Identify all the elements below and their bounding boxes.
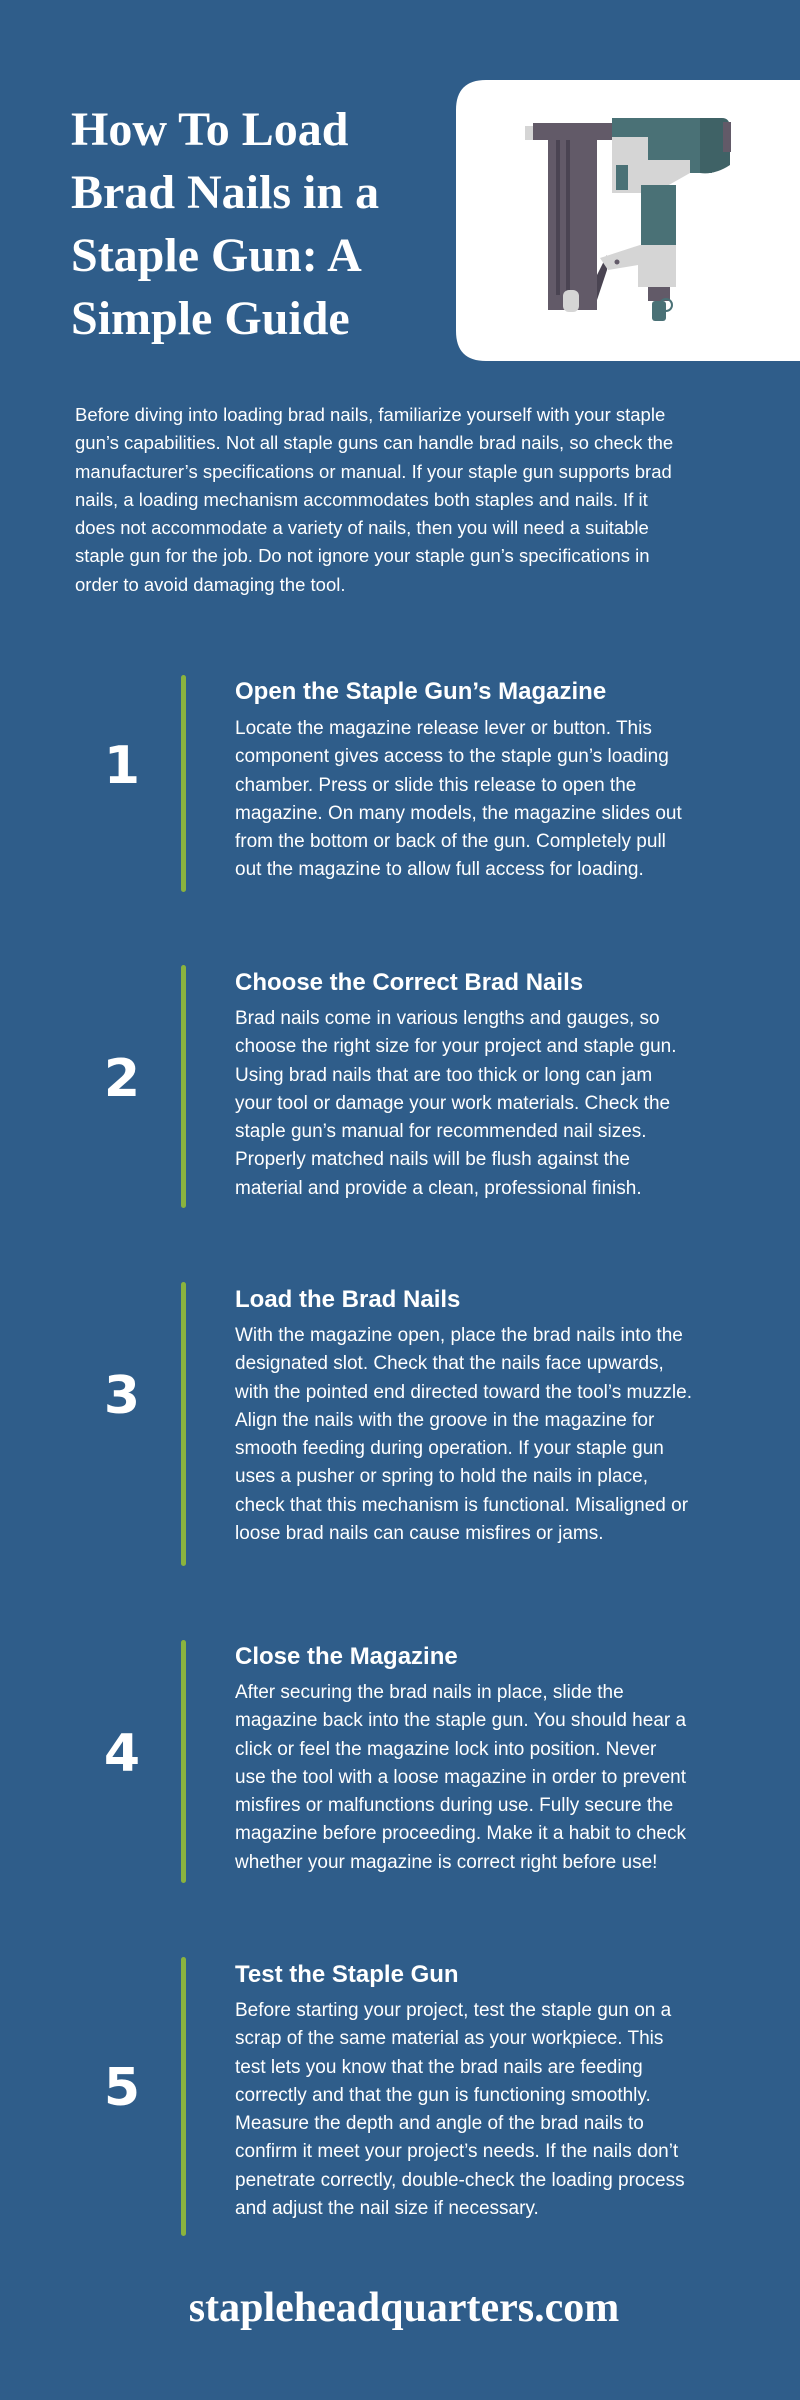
- panel: step 1: [104, 675, 682, 892]
- body 2: staple gun’s manual for recommended nail sizes.: [235, 1121, 647, 1142]
- illustration panel: nail gun: [456, 80, 800, 361]
- divider bar 2: [181, 965, 186, 1208]
- intro text: order to avoid damaging the tool.: [75, 574, 345, 595]
- body 1: out the magazine to allow full access for loading.: [235, 859, 644, 880]
- body 2: Properly matched nails will be flush against the: [235, 1149, 630, 1170]
- body 4: magazine before proceeding. Make it a habit to check: [235, 1823, 686, 1844]
- body 5: Before starting your project, test the staple gun on a: [235, 2000, 671, 2021]
- body 3: check that this mechanism is functional. Misaligned or: [235, 1495, 688, 1516]
- body 1: chamber. Press or slide this release to open the: [235, 775, 636, 796]
- body 1: Locate the magazine release lever or button. This: [235, 718, 652, 739]
- panel: step 3: [104, 1282, 692, 1566]
- body 5: Measure the depth and angle of the brad nails to: [235, 2113, 644, 2134]
- divider bar 1: [181, 675, 186, 892]
- body 3: designated slot. Check that the nails face upwards,: [235, 1353, 664, 1374]
- icon: nail gun: [525, 118, 731, 321]
- body 5: test lets you know that the brad nails are feeding: [235, 2057, 643, 2078]
- step number 5: 5: [104, 2058, 140, 2118]
- body 4: magazine back into the staple gun. You should hear a: [235, 1710, 686, 1731]
- intro text: [75, 404, 673, 595]
- intro text: gun’s capabilities. Not all staple guns can handle brad nails, so check the: [75, 432, 673, 453]
- body 3: loose brad nails can cause misfires or jams.: [235, 1523, 604, 1544]
- heading 1: Open the Staple Gun’s Magazine: [235, 678, 606, 705]
- panel: step 2: [104, 965, 676, 1208]
- body 2: your tool or damage your work materials. Check the: [235, 1093, 670, 1114]
- title: How To Load: [71, 103, 348, 156]
- body 3: uses a pusher or spring to hold the nails in place,: [235, 1466, 648, 1487]
- divider bar 4: [181, 1640, 186, 1883]
- body 2: [235, 1008, 676, 1199]
- heading 4: Close the Magazine: [235, 1643, 458, 1670]
- step number 4: 4: [104, 1724, 140, 1784]
- title: [71, 103, 379, 345]
- footer: website: stapleheadquarters.com: [189, 2285, 619, 2331]
- body 1: magazine. On many models, the magazine slides out: [235, 803, 682, 824]
- body 1: component gives access to the staple gun’s loading: [235, 746, 669, 767]
- body 5: [235, 2000, 685, 2219]
- body 2: Brad nails come in various lengths and gauges, so: [235, 1008, 660, 1029]
- step number 3: 3: [104, 1366, 140, 1426]
- heading 3: Load the Brad Nails: [235, 1286, 460, 1313]
- body 4: misfires or malfunctions during use. Fully secure the: [235, 1795, 673, 1816]
- body 4: use the tool with a loose magazine in order to prevent: [235, 1767, 686, 1788]
- body 4: [235, 1682, 686, 1873]
- body 5: confirm it meet your project’s needs. If the nails don’t: [235, 2141, 678, 2162]
- intro text: does not accommodate a variety of nails, then you will need a suitable: [75, 517, 649, 538]
- body 2: choose the right size for your project and staple gun.: [235, 1036, 676, 1057]
- heading 2: Choose the Correct Brad Nails: [235, 969, 583, 996]
- intro text: manufacturer’s specifications or manual. If your staple gun supports brad: [75, 461, 672, 482]
- intro text: nails, a loading mechanism accommodates both staples and nails. If it: [75, 489, 648, 510]
- body 5: correctly and that the gun is functioning smoothly.: [235, 2085, 651, 2106]
- panel: step 5: [104, 1957, 685, 2236]
- body 4: After securing the brad nails in place, slide the: [235, 1682, 624, 1703]
- intro text: staple gun for the job. Do not ignore your staple gun’s specifications in: [75, 545, 650, 566]
- body 4: click or feel the magazine lock into position. Never: [235, 1739, 656, 1760]
- divider bar 5: [181, 1957, 186, 2236]
- body 3: With the magazine open, place the brad nails into the: [235, 1325, 683, 1346]
- body 3: [235, 1325, 692, 1544]
- body 3: Align the nails with the groove in the magazine for: [235, 1410, 654, 1431]
- panel: step 4: [104, 1640, 686, 1883]
- body 1: [235, 718, 682, 880]
- body 5: scrap of the same material as your workpiece. This: [235, 2028, 663, 2049]
- step number 2: 2: [104, 1049, 140, 1109]
- heading 5: Test the Staple Gun: [235, 1961, 459, 1988]
- body 4: whether your magazine is correct right before use!: [235, 1852, 657, 1873]
- step number 1: 1: [104, 736, 140, 796]
- title: Staple Gun: A: [71, 229, 362, 282]
- body 2: Using brad nails that are too thick or long can jam: [235, 1065, 652, 1086]
- body 2: material and provide a clean, professional finish.: [235, 1178, 642, 1199]
- title: Brad Nails in a: [71, 166, 379, 219]
- body 5: and adjust the nail size if necessary.: [235, 2198, 539, 2219]
- divider bar 3: [181, 1282, 186, 1566]
- body 5: penetrate correctly, double-check the loading process: [235, 2170, 685, 2191]
- body 3: smooth feeding during operation. If your staple gun: [235, 1438, 664, 1459]
- title: Simple Guide: [71, 292, 350, 345]
- body 1: from the bottom or back of the gun. Completely pull: [235, 831, 666, 852]
- body 3: with the pointed end directed toward the tool’s muzzle.: [235, 1382, 692, 1403]
- intro text: Before diving into loading brad nails, familiarize yourself with your staple: [75, 404, 665, 425]
